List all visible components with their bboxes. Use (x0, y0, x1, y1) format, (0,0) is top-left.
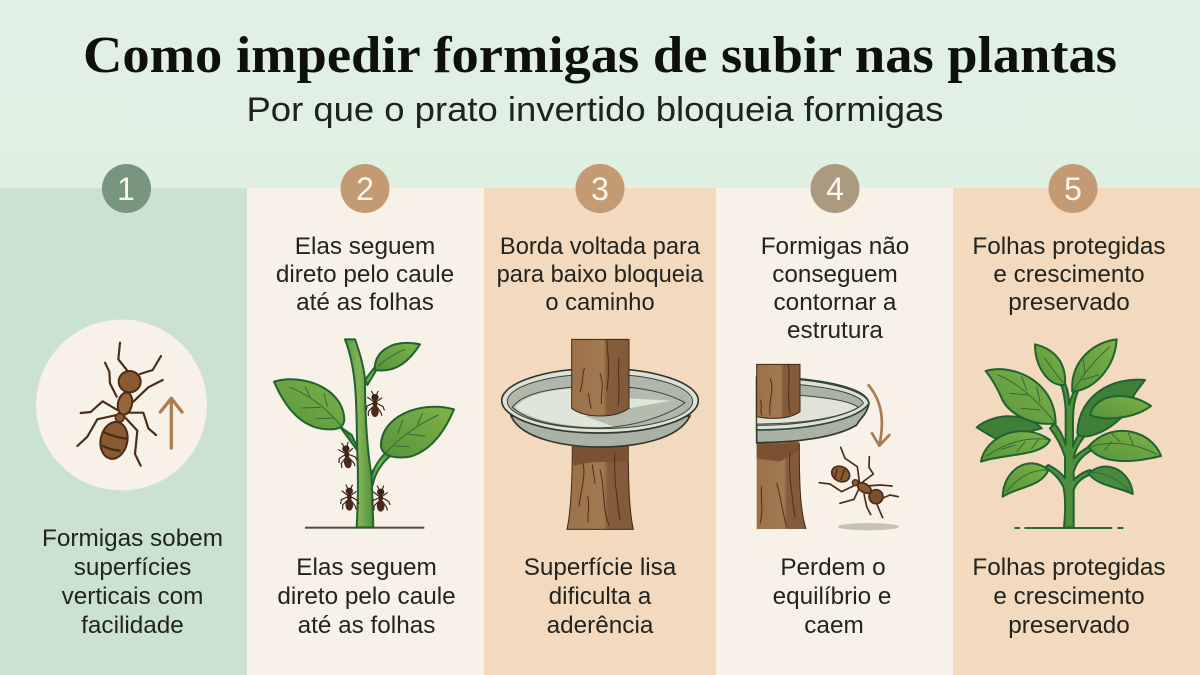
ground (1014, 525, 1123, 531)
badge 2 (340, 164, 390, 213)
text: step 1 bottom: facilidade (81, 612, 184, 639)
text: step 2 top: Elas seguem (295, 233, 435, 260)
shadow (838, 523, 899, 530)
badge 2: 2 (356, 171, 374, 207)
text: step 3 bottom: Superfície lisa (524, 554, 677, 581)
text: step 2 bottom: direto pelo caule (277, 583, 456, 610)
stem and branches (1045, 385, 1092, 527)
icon: trunk through inverted plate (502, 339, 698, 529)
text: step 2 bottom: Elas seguem (296, 554, 437, 581)
arrow: upward (160, 398, 182, 448)
text: step 5 bottom: preservado (1008, 612, 1130, 639)
icon: falling ant (819, 447, 898, 518)
text: step 1 bottom: Formigas sobem (42, 525, 223, 552)
badge 4 (810, 164, 860, 213)
text: step 4 top: Formigas não (761, 233, 909, 260)
icon: plant stem with ants (274, 339, 454, 529)
panel: step 2 background (247, 188, 484, 675)
text: step 3 top: o caminho (545, 290, 655, 316)
badge 1 (102, 164, 151, 213)
text: step 5 top: preservado (1008, 289, 1130, 316)
icon: healthy plant (977, 339, 1161, 528)
text: step 4 top: conseguem (772, 261, 898, 288)
text: step 5 top: Folhas protegidas (972, 233, 1166, 260)
title: Como impedir formigas de subir nas plantas (83, 27, 1117, 84)
text: step 3 top: Borda voltada para (500, 234, 701, 260)
panel: step 3 background (484, 188, 716, 675)
panel: step 1 background (0, 188, 247, 675)
leaves (977, 339, 1161, 497)
text: step 3 bottom: dificulta a (549, 583, 652, 610)
panel: step 4 background (716, 188, 953, 675)
badge 3: 3 (591, 171, 609, 207)
text: step 3 top: para baixo bloqueia (497, 262, 704, 288)
icon: small ant 3 (341, 485, 359, 511)
badge 5 (1048, 164, 1098, 213)
icon: ant climbing in circle (36, 320, 207, 490)
text: step 4 bottom: equilíbrio e (773, 583, 891, 610)
icon: ant falling from plate (757, 364, 899, 530)
badge 1: 1 (117, 171, 135, 207)
text: step 2 top: direto pelo caule (276, 261, 454, 288)
text: step 4 bottom: caem (804, 612, 864, 639)
trunk lower (757, 442, 806, 529)
subtitle: Por que o prato invertido bloqueia formigas (246, 91, 944, 129)
header background (0, 0, 1200, 188)
panel: step 5 background (953, 188, 1200, 675)
text: step 4 top: contornar a (774, 289, 897, 316)
icon: ant body and legs (77, 343, 163, 466)
arrow: downward curve (869, 385, 889, 446)
text: step 4 bottom: Perdem o (780, 554, 886, 581)
text: step 5 bottom: Folhas protegidas (972, 554, 1166, 581)
text: step 5 top: e crescimento (993, 261, 1145, 288)
icon: small ant 4 (372, 486, 390, 512)
plate (757, 377, 869, 443)
badge 3 (576, 164, 624, 213)
icon: small ant 2 (336, 442, 358, 469)
trunk upper (757, 364, 800, 418)
icon: small ant 1 (366, 391, 384, 417)
badge 5: 5 (1064, 171, 1082, 207)
text: step 4 top: estrutura (787, 317, 883, 344)
text: step 1 bottom: verticais com (62, 583, 203, 610)
text: step 2 top: até as folhas (296, 289, 434, 316)
text: step 1 bottom: superfícies (74, 554, 191, 581)
plate (502, 368, 698, 447)
trunk lower (567, 445, 633, 529)
text: step 5 bottom: e crescimento (993, 583, 1145, 610)
badge 4: 4 (826, 171, 844, 207)
text: step 3 bottom: aderência (547, 612, 654, 639)
trunk upper (572, 339, 629, 416)
text: step 2 bottom: até as folhas (298, 612, 435, 639)
